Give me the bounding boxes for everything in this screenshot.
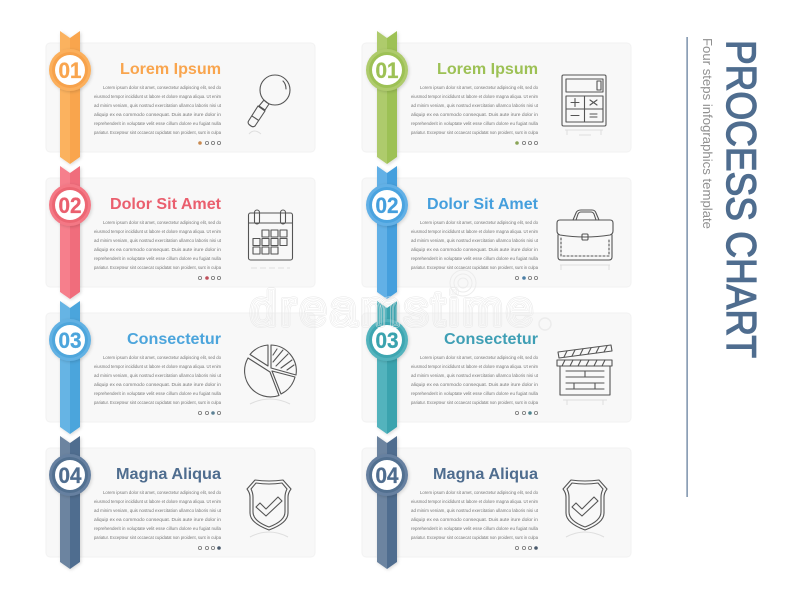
body text: eiusmod tempor incididunt ut labore et dolore magna aliqua. Ut enim (411, 229, 538, 234)
body text (411, 490, 539, 540)
body text: Lorem ipsum dolor sit amet, consectetur adipiscing elit, sed do (420, 355, 538, 360)
page dots (198, 411, 221, 415)
watermark (250, 270, 552, 330)
panel: left step 3 (46, 301, 315, 434)
heading: Dolor Sit Amet (110, 196, 222, 213)
body text: eiusmod tempor incididunt ut labore et dolore magna aliqua. Ut enim (411, 364, 538, 369)
body text: pariatur. Excepteur sint occaecat cupidatat non proident, sunt in culpa (94, 535, 221, 540)
body text: ad minim veniam, quis nostrud exercitation ullamco laboris nisi ut (411, 238, 539, 243)
heading: Lorem Ipsum (120, 61, 221, 78)
body text: ad minim veniam, quis nostrud exercitation ullamco laboris nisi ut (94, 373, 222, 378)
body text: pariatur. Excepteur sint occaecat cupidatat non proident, sunt in culpa (411, 265, 538, 270)
ribbon (377, 436, 397, 569)
panel: right step 2 (362, 166, 631, 299)
body text: pariatur. Excepteur sint occaecat cupidatat non proident, sunt in culpa (411, 130, 538, 135)
body text: aliquip ex ea commodo consequat. Duis aute irure dolor in (411, 517, 539, 522)
heading: Magna Aliqua (116, 466, 221, 483)
page dots (515, 546, 538, 550)
icon: pie chart (245, 345, 296, 404)
page dots (198, 546, 221, 550)
body text: eiusmod tempor incididunt ut labore et dolore magna aliqua. Ut enim (94, 364, 221, 369)
body text: Lorem ipsum dolor sit amet, consectetur adipiscing elit, sed do (420, 85, 538, 90)
body text: Lorem ipsum dolor sit amet, consectetur adipiscing elit, sed do (420, 220, 538, 225)
body text (94, 355, 222, 405)
card background (46, 448, 315, 557)
icon: clapperboard (557, 345, 612, 405)
number badge (366, 49, 408, 91)
number badge (49, 49, 91, 91)
panel: right step 3 (362, 301, 631, 434)
body text: aliquip ex ea commodo consequat. Duis aute irure dolor in (94, 382, 222, 387)
icon: magnifying glass (248, 75, 290, 134)
heading: Consectetur (444, 331, 538, 348)
heading: Dolor Sit Amet (427, 196, 539, 213)
panel: left step 1 (46, 31, 315, 164)
panel: right step 1 (362, 31, 631, 164)
body text: pariatur. Excepteur sint occaecat cupidatat non proident, sunt in culpa (94, 265, 221, 270)
ribbon (60, 31, 80, 164)
page dots (515, 276, 538, 280)
body text: ad minim veniam, quis nostrud exercitation ullamco laboris nisi ut (94, 238, 222, 243)
ribbon (60, 301, 80, 434)
body text (94, 490, 222, 540)
number badge: 03 (376, 328, 398, 353)
body text: ad minim veniam, quis nostrud exercitation ullamco laboris nisi ut (411, 103, 539, 108)
number badge: 02 (58, 193, 82, 218)
body text: ad minim veniam, quis nostrud exercitation ullamco laboris nisi ut (94, 103, 222, 108)
icon: shield with check (247, 480, 291, 537)
body text: reprehenderit in voluptate velit esse cillum dolore eu fugiat nulla (94, 391, 221, 396)
body text: Lorem ipsum dolor sit amet, consectetur adipiscing elit, sed do (103, 355, 221, 360)
body text: pariatur. Excepteur sint occaecat cupidatat non proident, sunt in culpa (94, 130, 221, 135)
card background (46, 313, 315, 422)
number badge (366, 319, 408, 361)
body text: Lorem ipsum dolor sit amet, consectetur adipiscing elit, sed do (420, 490, 538, 495)
body text: ad minim veniam, quis nostrud exercitation ullamco laboris nisi ut (94, 508, 222, 513)
body text: eiusmod tempor incididunt ut labore et dolore magna aliqua. Ut enim (411, 94, 538, 99)
ribbon (377, 166, 397, 299)
body text: eiusmod tempor incididunt ut labore et dolore magna aliqua. Ut enim (411, 499, 538, 504)
body text: reprehenderit in voluptate velit esse cillum dolore eu fugiat nulla (94, 256, 221, 261)
divider line (686, 37, 688, 497)
body text: reprehenderit in voluptate velit esse cillum dolore eu fugiat nulla (411, 391, 538, 396)
subtitle: Four steps infographics template (700, 38, 714, 229)
body text: Lorem ipsum dolor sit amet, consectetur adipiscing elit, sed do (103, 85, 221, 90)
number badge: 01 (376, 58, 398, 83)
icon: calculator (562, 75, 606, 135)
body text: pariatur. Excepteur sint occaecat cupidatat non proident, sunt in culpa (411, 400, 538, 405)
body text: aliquip ex ea commodo consequat. Duis aute irure dolor in (411, 112, 539, 117)
body text: reprehenderit in voluptate velit esse cillum dolore eu fugiat nulla (411, 121, 538, 126)
title: PROCESS CHART (718, 40, 765, 358)
body text: aliquip ex ea commodo consequat. Duis aute irure dolor in (94, 517, 222, 522)
number badge (49, 454, 91, 496)
number badge: 03 (58, 328, 82, 353)
number badge: 04 (58, 463, 82, 488)
card background (362, 178, 631, 287)
body text: aliquip ex ea commodo consequat. Duis aute irure dolor in (411, 247, 539, 252)
card background (46, 43, 315, 152)
card background (362, 313, 631, 422)
card background (46, 178, 315, 287)
ribbon (60, 436, 80, 569)
body text: aliquip ex ea commodo consequat. Duis aute irure dolor in (94, 112, 222, 117)
body text: eiusmod tempor incididunt ut labore et dolore magna aliqua. Ut enim (94, 499, 221, 504)
icon: calendar (248, 210, 292, 268)
body text: reprehenderit in voluptate velit esse cillum dolore eu fugiat nulla (94, 526, 221, 531)
body text (411, 355, 539, 405)
body text: aliquip ex ea commodo consequat. Duis aute irure dolor in (94, 247, 222, 252)
page dots (198, 141, 221, 145)
number badge: 02 (376, 193, 398, 218)
body text (94, 85, 222, 135)
panel: left step 2 (46, 166, 315, 299)
icon: briefcase (557, 210, 613, 270)
number badge: 04 (376, 463, 399, 488)
number badge (366, 184, 408, 226)
body text: reprehenderit in voluptate velit esse cillum dolore eu fugiat nulla (411, 256, 538, 261)
body text: ad minim veniam, quis nostrud exercitation ullamco laboris nisi ut (411, 373, 539, 378)
number badge (49, 184, 91, 226)
heading: Consectetur (127, 331, 221, 348)
ribbon (377, 31, 397, 164)
body text: reprehenderit in voluptate velit esse cillum dolore eu fugiat nulla (94, 121, 221, 126)
number badge (49, 319, 91, 361)
body text: pariatur. Excepteur sint occaecat cupidatat non proident, sunt in culpa (94, 400, 221, 405)
body text: eiusmod tempor incididunt ut labore et dolore magna aliqua. Ut enim (94, 94, 221, 99)
card background (362, 43, 631, 152)
number badge (366, 454, 408, 496)
icon: shield with check (563, 480, 607, 537)
body text: reprehenderit in voluptate velit esse cillum dolore eu fugiat nulla (411, 526, 538, 531)
body text (411, 85, 539, 135)
number badge: 01 (58, 58, 82, 83)
ribbon (60, 166, 80, 299)
heading: Magna Aliqua (433, 466, 538, 483)
ribbon (377, 301, 397, 434)
page dots (515, 411, 538, 415)
body text: eiusmod tempor incididunt ut labore et dolore magna aliqua. Ut enim (94, 229, 221, 234)
body text: pariatur. Excepteur sint occaecat cupidatat non proident, sunt in culpa (411, 535, 538, 540)
heading: Lorem Ipsum (437, 61, 538, 78)
body text (94, 220, 222, 270)
body text: Lorem ipsum dolor sit amet, consectetur adipiscing elit, sed do (103, 220, 221, 225)
panel: left step 4 (46, 436, 315, 569)
page dots (515, 141, 538, 145)
card background (362, 448, 631, 557)
page dots (198, 276, 221, 280)
body text: Lorem ipsum dolor sit amet, consectetur adipiscing elit, sed do (103, 490, 221, 495)
body text: aliquip ex ea commodo consequat. Duis aute irure dolor in (411, 382, 539, 387)
panel: right step 4 (362, 436, 631, 569)
body text (411, 220, 539, 270)
body text: ad minim veniam, quis nostrud exercitation ullamco laboris nisi ut (411, 508, 539, 513)
